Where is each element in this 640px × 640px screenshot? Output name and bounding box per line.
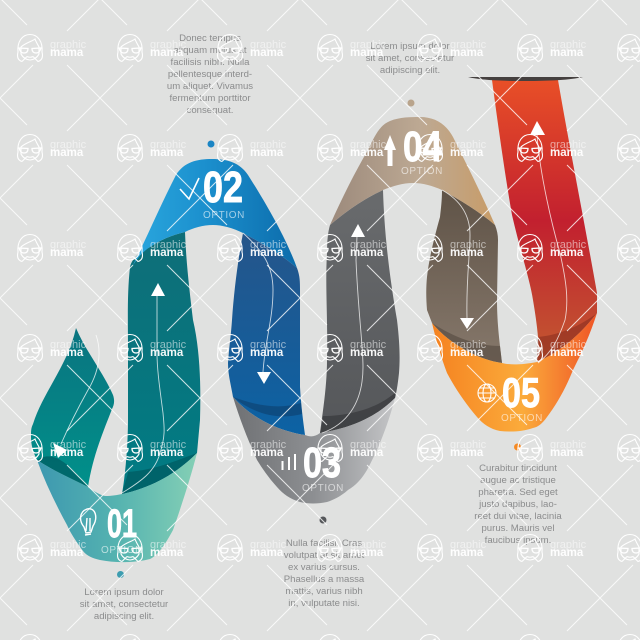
option 03 label <box>282 439 344 494</box>
watermark wordmarks: graphic <box>50 439 87 451</box>
text block: option 03: volutpat at sit amet <box>284 550 365 561</box>
watermark wordmarks: mama <box>550 47 584 59</box>
watermark wordmarks: graphic <box>150 439 187 451</box>
text block: option 05: purus. Mauris vel <box>481 523 555 534</box>
text block: option 02: pellentesque interd- <box>168 69 252 80</box>
option 01 label <box>81 502 143 556</box>
dot: option 03 <box>320 516 326 524</box>
watermark wordmarks: mama <box>350 547 384 559</box>
number 04: 04 <box>403 123 442 171</box>
watermark wordmarks: graphic <box>150 139 187 151</box>
option text: OPTION <box>203 210 245 221</box>
text block: option 03: ex varius cursus. <box>288 562 360 573</box>
icon: check mark <box>180 178 199 199</box>
watermark wordmarks: mama <box>450 47 484 59</box>
watermark wordmarks: mama <box>250 47 284 59</box>
watermark wordmarks: mama <box>550 547 584 559</box>
flow line: red <box>530 121 567 363</box>
fold shadow: brown strip <box>432 323 502 363</box>
flow line: gray <box>322 224 365 433</box>
watermark wordmarks: graphic <box>250 339 287 351</box>
dot: option 05 <box>514 444 521 450</box>
watermark wordmarks: mama <box>150 147 184 159</box>
flow line: segment 01 <box>53 283 165 493</box>
text block: option 01: adipiscing elit. <box>94 611 154 622</box>
watermark wordmarks: mama <box>50 247 84 259</box>
watermark wordmarks: graphic <box>550 539 587 551</box>
watermark wordmarks: mama <box>350 247 384 259</box>
watermark wordmarks: graphic <box>550 339 587 351</box>
panel: segment 04 band <box>330 117 495 225</box>
watermark wordmarks: graphic <box>350 139 387 151</box>
dot: option 04 <box>408 100 414 106</box>
watermark wordmarks: graphic <box>550 39 587 51</box>
text block: option 04: sit amet, consectetur <box>366 53 455 64</box>
text block: option 03: Phasellus a massa <box>284 574 365 585</box>
watermark wordmarks: graphic <box>550 139 587 151</box>
arrow: blue down <box>257 372 271 384</box>
flow line: blue <box>243 233 273 384</box>
option text: OPTION <box>401 166 443 177</box>
watermark wordmarks: mama <box>550 347 584 359</box>
watermark wordmarks: graphic <box>250 539 287 551</box>
watermark wordmarks: mama <box>150 547 184 559</box>
text block: option 02: facilisis nibh. Nulla <box>171 57 250 68</box>
text block: option 01: Lorem ipsum dolor <box>84 587 165 598</box>
watermark wordmarks: mama <box>50 447 84 459</box>
number 03: 03 <box>303 439 341 487</box>
watermark wordmarks: mama <box>450 347 484 359</box>
fold shadow: blue strip <box>233 397 302 416</box>
watermark wordmarks: mama <box>150 247 184 259</box>
watermark wordmarks: graphic <box>550 439 587 451</box>
option 02 label <box>180 163 245 221</box>
number 05: 05 <box>502 369 540 416</box>
text block: option 02: consequat. <box>187 105 233 116</box>
watermark wordmarks: mama <box>350 347 384 359</box>
watermark wordmarks: graphic <box>350 239 387 251</box>
watermark wordmarks: mama <box>350 447 384 459</box>
option text: OPTION <box>501 413 543 424</box>
watermark wordmarks: graphic <box>450 439 487 451</box>
watermark wordmarks: mama <box>250 547 284 559</box>
watermark wordmarks: mama <box>150 47 184 59</box>
watermark wordmarks: mama <box>550 147 584 159</box>
ribbon: segment 01 leaf tail <box>31 328 114 487</box>
watermark wordmarks: mama <box>450 547 484 559</box>
watermark wordmarks: mama <box>550 447 584 459</box>
icon: bars <box>282 454 295 470</box>
icon: up arrow <box>384 135 396 166</box>
watermark wordmarks: mama <box>150 347 184 359</box>
panel: segment 01 band <box>37 453 197 562</box>
ribbon: brown falling strip <box>426 190 502 363</box>
watermark wordmarks: graphic <box>250 39 287 51</box>
ribbon: teal rising strip <box>122 232 200 494</box>
number 02: 02 <box>203 163 243 212</box>
watermark wordmarks: graphic <box>50 539 87 551</box>
watermark wordmarks: mama <box>250 247 284 259</box>
panel: segment 02 band <box>132 159 297 268</box>
option text: OPTION <box>101 545 143 556</box>
ribbon: gray rising strip <box>320 190 400 433</box>
text block: option 03: mattis, varius nibh <box>285 586 363 597</box>
watermark wordmarks: graphic <box>50 339 87 351</box>
text block: option 02: fermentum porttitor <box>169 93 251 104</box>
watermark wordmarks: mama <box>250 147 284 159</box>
ribbon: red strip <box>492 80 597 362</box>
watermark wordmarks: mama <box>50 47 84 59</box>
watermark wordmarks: graphic <box>450 39 487 51</box>
watermark wordmarks <box>50 39 587 559</box>
text block: option 02: Donec tempus <box>179 33 241 44</box>
dot: option 02 <box>208 140 214 148</box>
fold shadow: red strip <box>537 313 597 362</box>
watermark wordmarks: graphic <box>450 239 487 251</box>
watermark wordmarks: mama <box>50 147 84 159</box>
text block: option 04: Lorem ipsum dolor <box>370 41 451 52</box>
watermark wordmarks: graphic <box>550 239 587 251</box>
text block: option 02: aliquam metus at <box>173 45 247 56</box>
arrow: segment 01 tail <box>53 443 67 458</box>
watermark wordmarks: graphic <box>50 39 87 51</box>
watermark wordmarks: mama <box>50 347 84 359</box>
text block: option 03: Nulla facilisi. Cras <box>286 538 362 549</box>
watermark wordmarks: graphic <box>150 539 187 551</box>
arrow: gray up <box>351 224 365 237</box>
arrow: brown down <box>460 318 474 329</box>
watermark wordmarks: mama <box>350 47 384 59</box>
watermark wordmarks: mama <box>250 347 284 359</box>
panel: segment 03 band <box>233 397 395 504</box>
watermark wordmarks: graphic <box>250 139 287 151</box>
icon: light bulb <box>81 509 96 535</box>
panel: segment 05 band <box>432 313 597 432</box>
watermark wordmarks: graphic <box>50 139 87 151</box>
watermark wordmarks: graphic <box>350 339 387 351</box>
ribbon: blue falling strip <box>228 233 305 435</box>
watermark wordmarks: mama <box>450 147 484 159</box>
text block: option 05: augue ac tristique <box>480 475 556 486</box>
flow line: brown <box>442 190 474 329</box>
text block: option 05: Curabitur tincidunt <box>479 463 557 474</box>
text block: option 05: reet dui vitae, lacinia <box>474 511 562 522</box>
watermark wordmarks: graphic <box>450 339 487 351</box>
watermark wordmarks: graphic <box>250 239 287 251</box>
watermark wordmarks: graphic <box>250 439 287 451</box>
watermark wordmarks: mama <box>150 447 184 459</box>
option 05 label <box>478 369 543 424</box>
watermark wordmarks: mama <box>450 247 484 259</box>
watermark wordmarks: mama <box>250 447 284 459</box>
text block: option 05: faucibus ipsum. <box>485 535 551 546</box>
arrow: red up <box>530 121 545 135</box>
text block: option 05: pharetra. Sed eget <box>478 487 558 498</box>
watermark wordmarks: mama <box>350 147 384 159</box>
watermark wordmarks: graphic <box>450 539 487 551</box>
watermark wordmarks: graphic <box>50 239 87 251</box>
watermark wordmarks: mama <box>550 247 584 259</box>
watermark wordmarks: graphic <box>350 39 387 51</box>
text block: option 05: justo dapibus, lao- <box>478 499 557 510</box>
top bar <box>468 77 583 81</box>
fold shadow: segment 01 <box>37 453 197 494</box>
text block: option 01: sit amet, consectetur <box>80 599 169 610</box>
fold shadow: gray strip <box>320 392 396 433</box>
arrow: teal up <box>151 283 165 296</box>
text block: option 02: um aliquet. Vivamus <box>167 81 253 92</box>
watermark wordmarks: mama <box>50 547 84 559</box>
text block: option 03: in, vulputate nisi. <box>288 598 360 609</box>
watermark wordmarks: graphic <box>150 239 187 251</box>
option 04 label <box>384 123 443 177</box>
watermark wordmarks: graphic <box>150 339 187 351</box>
watermark wordmarks: graphic <box>350 539 387 551</box>
option text: OPTION <box>302 483 344 494</box>
watermark wordmarks: mama <box>450 447 484 459</box>
watermark wordmarks: graphic <box>450 139 487 151</box>
icon: globe <box>478 384 496 402</box>
watermark wordmarks: graphic <box>150 39 187 51</box>
number 01: 01 <box>107 502 137 546</box>
watermark wordmarks: graphic <box>350 439 387 451</box>
text block: option 04: adipiscing elit. <box>380 65 440 76</box>
dot: option 01 <box>117 571 124 578</box>
